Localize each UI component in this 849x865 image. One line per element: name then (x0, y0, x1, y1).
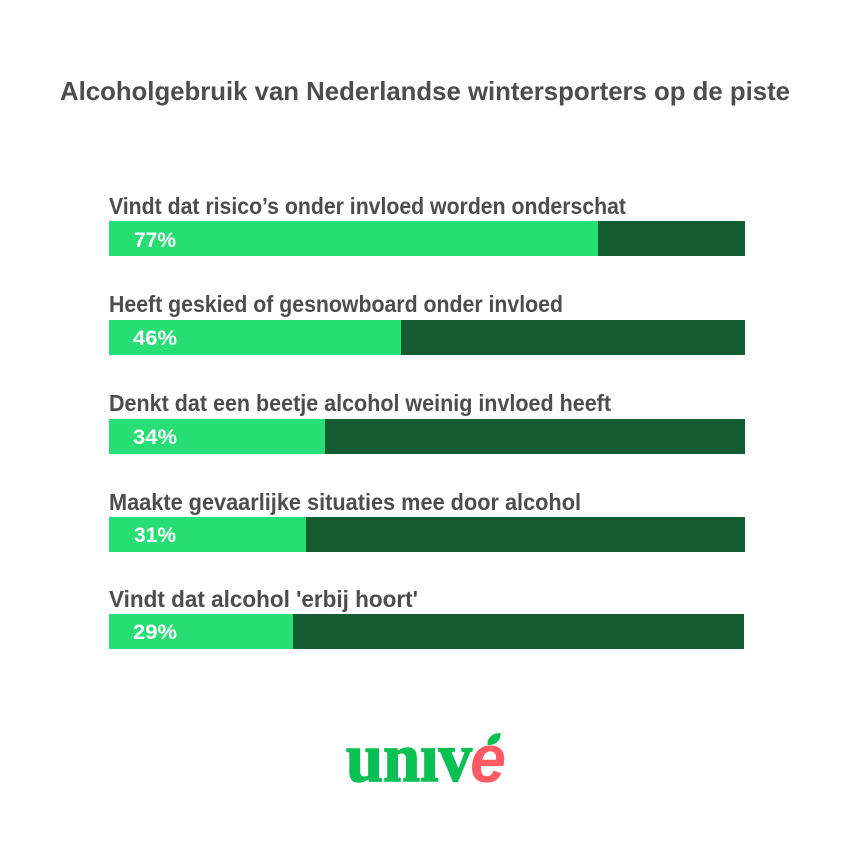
row: beetje alcohol 34%: 34% (133, 426, 177, 449)
title: Alcoholgebruik van Nederlandse wintersporters op de piste (60, 76, 790, 106)
row: geskied onder invloed 46% (109, 291, 745, 355)
row: risico's onderschat 77%: Vindt dat risico’s onder invloed worden onderschat (109, 193, 626, 219)
row: risico's onderschat 77%: 77% (134, 229, 176, 252)
logo: Univé: e (470, 721, 506, 797)
row: gevaarlijke situaties 31%: 31% (134, 524, 176, 547)
row: gevaarlijke situaties 31%: Maakte gevaarlijke situaties mee door alcohol (109, 489, 581, 515)
bar chart (109, 193, 745, 649)
row: beetje alcohol 34% (109, 390, 745, 454)
row: gevaarlijke situaties 31% (109, 489, 745, 552)
row: erbij hoort 29%: Vindt dat alcohol 'erbij hoort' (109, 586, 418, 612)
row: risico's onderschat 77% (109, 193, 745, 256)
row: geskied onder invloed 46%: 46% (133, 327, 177, 350)
row: beetje alcohol 34%: Denkt dat een beetje alcohol weinig invloed heeft (109, 390, 611, 416)
row: erbij hoort 29% (109, 586, 744, 649)
logo: Univé: unıv (346, 720, 472, 797)
row: geskied onder invloed 46%: Heeft geskied of gesnowboard onder invloed (109, 291, 563, 317)
row: erbij hoort 29%: 29% (133, 621, 177, 644)
icon: leaf (487, 733, 501, 745)
